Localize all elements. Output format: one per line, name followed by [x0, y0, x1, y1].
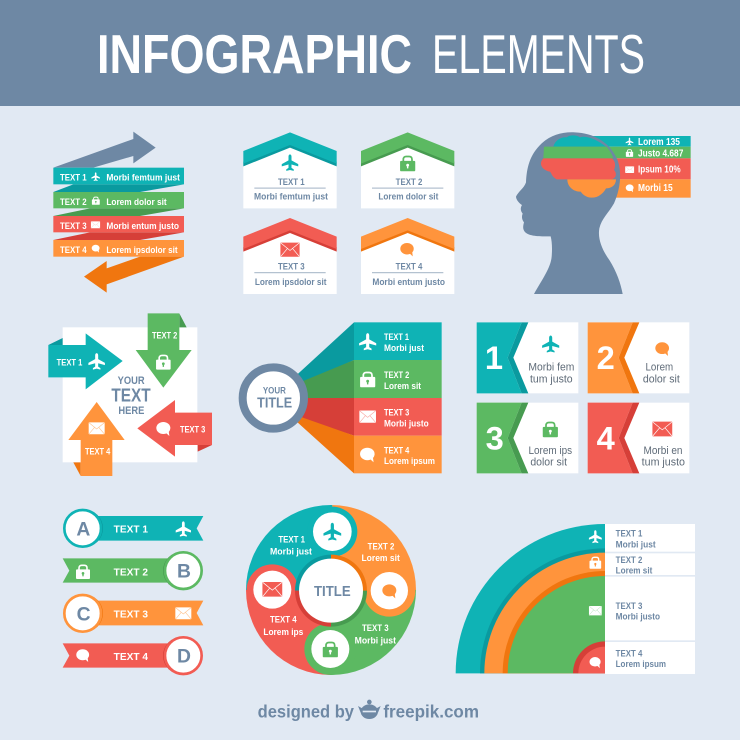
card 1	[243, 132, 337, 208]
ribbon A	[64, 509, 203, 547]
row 3: Morbi justo	[384, 419, 429, 429]
card 1: 1	[485, 339, 503, 376]
ribbon row 1	[53, 168, 184, 184]
panel: concentric arcs with rows	[456, 524, 695, 674]
labels on bars: Lorem 135	[638, 137, 680, 148]
card 4	[588, 403, 689, 473]
row labels: Lorem sit	[616, 565, 652, 575]
ribbon row 2: Lorem dolor sit	[106, 197, 167, 207]
row labels	[616, 529, 666, 669]
card 3: 3	[486, 419, 504, 456]
card 4: tum justo	[642, 456, 685, 468]
center ring and title: TITLE	[314, 584, 351, 600]
row 1: TEXT 1	[384, 332, 409, 342]
card 3: dolor sit	[530, 456, 568, 468]
row labels: TEXT 4	[616, 649, 642, 659]
arrow 1	[48, 333, 123, 389]
panel: ribbon list with arrows	[53, 132, 184, 293]
arrow: orange down-left	[84, 257, 184, 293]
panel: numbered cards	[477, 322, 689, 473]
card 3: Lorem ips	[528, 445, 572, 457]
row labels: Lorem ipsum	[616, 659, 666, 669]
labels on bars: Justo 4.687	[638, 149, 684, 160]
labels on bars: Ipsum 10%	[638, 165, 681, 176]
segment labels: Morbi just	[270, 547, 312, 557]
panel: house cards	[243, 132, 454, 294]
node: bubble	[371, 572, 408, 609]
header band with title: INFOGRAPHIC	[97, 23, 412, 85]
ribbon A: A	[76, 519, 90, 540]
data bars	[590, 136, 691, 198]
card 3: TEXT 3	[278, 262, 305, 272]
row 4: Lorem ipsum	[384, 456, 435, 466]
card 4: Morbi en	[643, 445, 682, 457]
card 2: TEXT 2	[396, 177, 422, 187]
row 2: TEXT 2	[384, 370, 409, 380]
card 3	[243, 218, 337, 294]
title circle: TITLE	[257, 394, 292, 411]
arrow 2	[136, 313, 192, 388]
card 2: dolor sit	[643, 374, 681, 386]
arrow 4: TEXT 4	[85, 446, 110, 456]
ribbon row 1: Morbi femtum just	[106, 173, 180, 183]
ribbon C: TEXT 3	[114, 610, 148, 621]
row 2	[354, 360, 442, 398]
segment labels: TEXT 3	[362, 623, 389, 633]
ribbon row 2	[53, 192, 184, 208]
card 1: tum justo	[530, 374, 573, 386]
node: lock	[311, 630, 349, 668]
ribbon B: TEXT 2	[114, 567, 148, 578]
ribbon D: TEXT 4	[114, 652, 148, 663]
segment labels: TEXT 4	[270, 615, 297, 625]
header band with title	[0, 0, 740, 106]
arrow 2: TEXT 2	[152, 330, 177, 340]
node: mail	[253, 571, 291, 609]
card 4: Morbi entum justo	[372, 277, 445, 287]
header band with title: ELEMENTS	[432, 23, 645, 85]
ribbon row 3: Morbi entum justo	[106, 221, 179, 231]
row 1	[354, 322, 442, 360]
labels on bars: Morbi 15	[638, 183, 673, 194]
ribbon B: B	[177, 562, 191, 583]
ribbon row 4: TEXT 4	[60, 245, 87, 255]
panel: lettered ribbons	[63, 509, 203, 675]
ribbon row 3	[53, 216, 184, 232]
row 4: TEXT 4	[384, 446, 409, 456]
ribbon C	[64, 594, 203, 632]
ribbon row 4	[53, 240, 184, 257]
row labels: TEXT 3	[616, 601, 642, 611]
brain	[541, 135, 616, 198]
card 4: 4	[597, 419, 615, 456]
row labels: Morbi justo	[616, 611, 660, 621]
card 1: Morbi femtum just	[254, 191, 328, 201]
center text	[111, 375, 151, 417]
ribbon D: D	[177, 647, 191, 668]
segment labels: TEXT 2	[368, 542, 394, 552]
arc icons	[589, 530, 602, 668]
card 2: Lorem dolor sit	[378, 191, 438, 201]
card 1: TEXT 1	[278, 177, 305, 187]
footer credit: freepik.com	[383, 701, 479, 721]
card 3: Lorem ipsdolor sit	[255, 277, 326, 287]
segment labels: Lorem ips	[263, 627, 303, 637]
row labels: Morbi just	[616, 539, 656, 549]
panel: four arrows on white square	[48, 313, 212, 476]
ribbon row 1: TEXT 1	[60, 173, 87, 183]
row labels: TEXT 2	[616, 555, 642, 565]
card 2: Lorem	[645, 362, 673, 374]
ribbon A: TEXT 1	[114, 525, 148, 536]
icon: freepik mascot	[358, 700, 381, 719]
center text: HERE	[118, 405, 145, 417]
ribbon D	[63, 637, 202, 675]
row 1: Morbi just	[384, 343, 424, 353]
card 4	[361, 218, 454, 294]
card 2	[588, 322, 689, 393]
panel: title circle with fan rows	[243, 322, 442, 473]
panel: head with brain data bars	[516, 132, 691, 294]
arrow 1: TEXT 1	[57, 357, 82, 367]
card 2: 2	[597, 339, 615, 376]
segment labels: Morbi just	[355, 635, 396, 645]
card 4: TEXT 4	[396, 262, 423, 272]
ribbon row 2: TEXT 2	[60, 197, 87, 207]
arrow 3	[137, 400, 212, 457]
row 3: TEXT 3	[384, 408, 409, 418]
segment labels	[263, 535, 400, 645]
ribbon row 4: Lorem ipsdolor sit	[106, 245, 178, 255]
arcs	[456, 524, 605, 673]
center text: YOUR	[118, 375, 145, 387]
center text: TEXT	[111, 385, 151, 406]
footer credit	[258, 700, 479, 721]
title circle: YOUR	[263, 385, 286, 395]
arrow: slate up-right	[53, 132, 156, 168]
footer credit: designed by	[258, 701, 354, 721]
swirl segments	[243, 503, 419, 677]
labels on bars	[625, 137, 684, 194]
row 2: Lorem sit	[384, 381, 421, 391]
row 3	[354, 398, 442, 436]
row 4	[354, 436, 442, 473]
segment labels: Lorem sit	[361, 553, 400, 563]
segment labels: TEXT 1	[278, 535, 305, 545]
head silhouette	[516, 132, 623, 294]
card 1: Morbi fem	[528, 362, 574, 374]
arrow 4	[68, 402, 125, 476]
ribbon row 3: TEXT 3	[60, 221, 87, 231]
card 2	[361, 132, 454, 208]
white rows	[605, 524, 695, 674]
ribbon C: C	[77, 604, 91, 625]
panel: swirl circle	[243, 503, 419, 677]
ribbon B	[63, 552, 202, 590]
center ring and title	[295, 555, 367, 627]
card 1	[477, 322, 578, 393]
card 3	[477, 403, 578, 473]
row labels: TEXT 1	[616, 529, 642, 539]
arrow 3: TEXT 3	[180, 424, 205, 434]
node: plane	[313, 512, 352, 551]
title circle	[243, 367, 304, 429]
fan wedges	[297, 322, 354, 473]
